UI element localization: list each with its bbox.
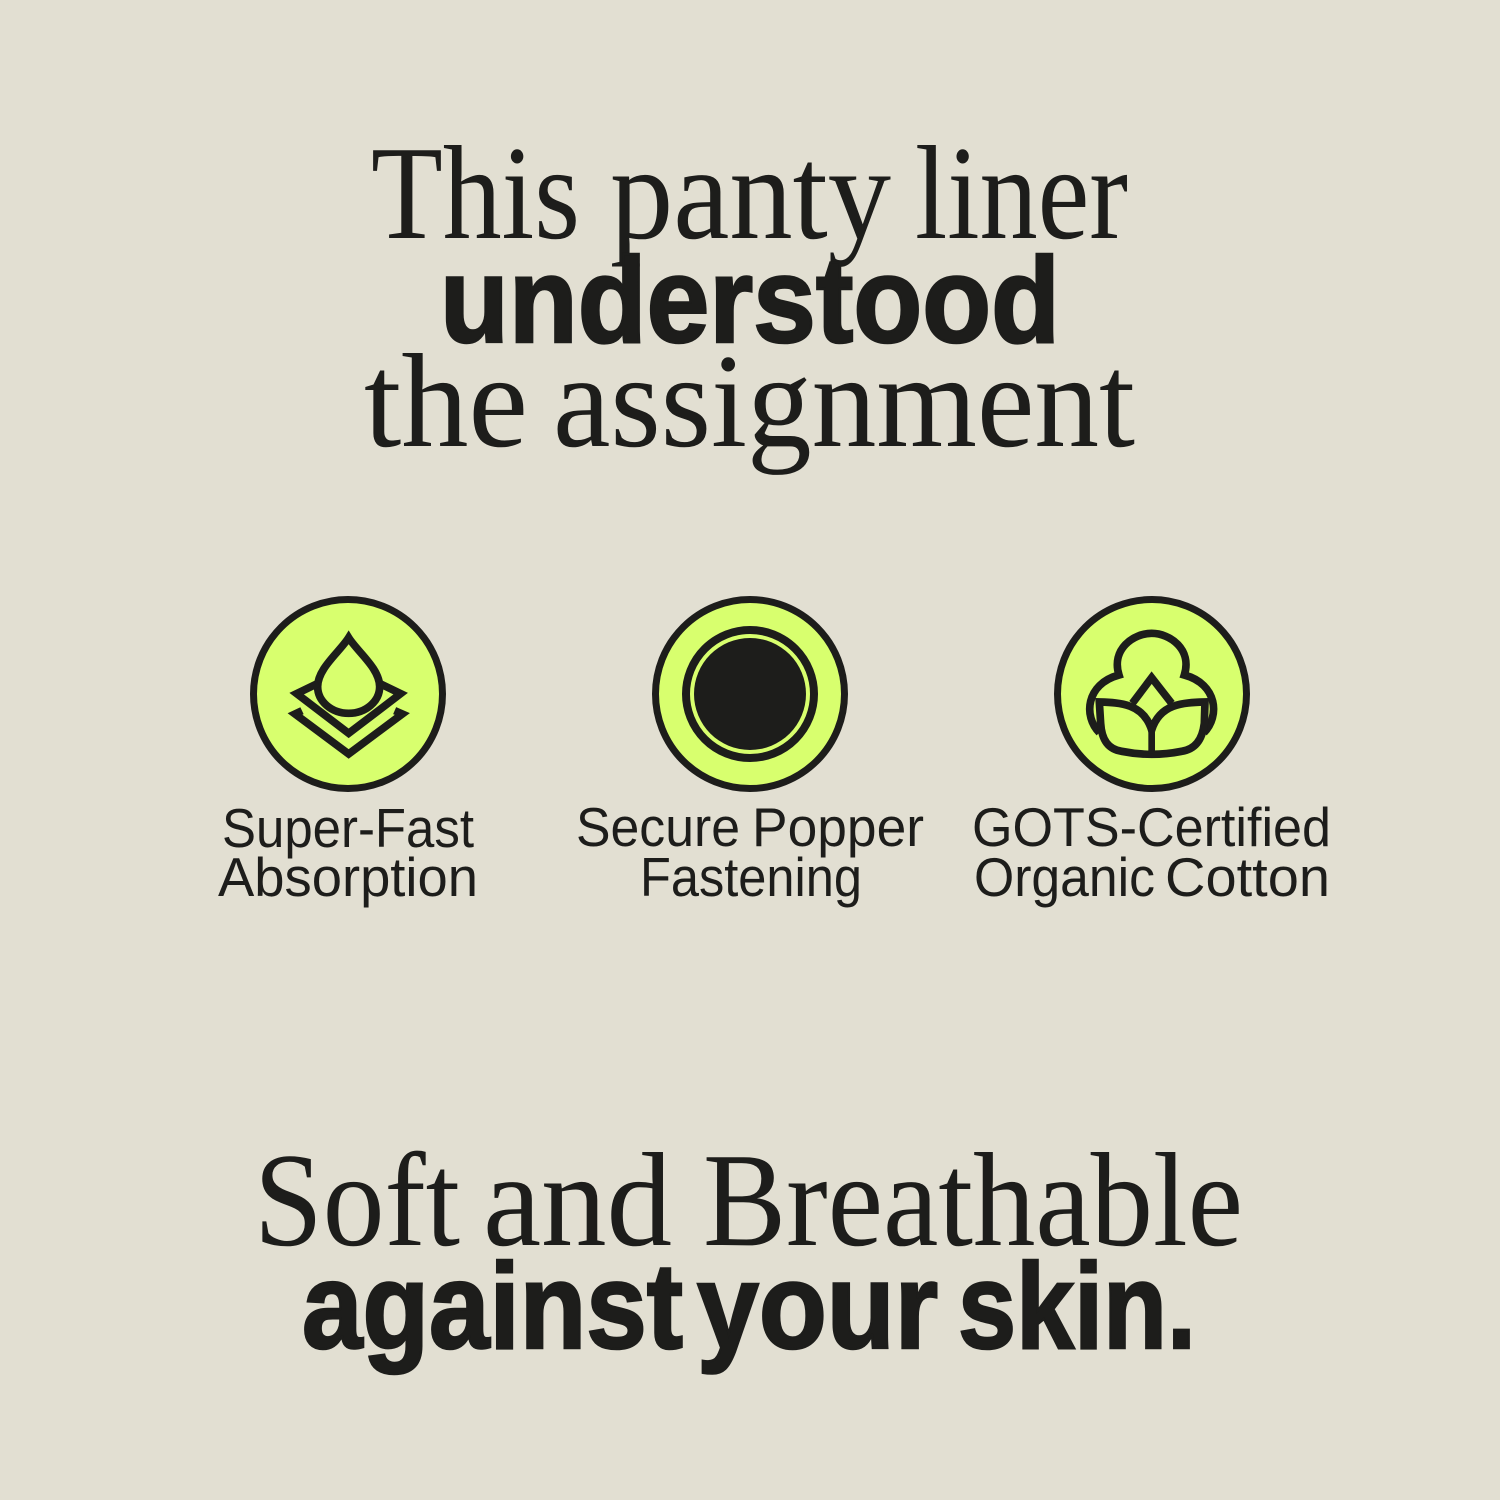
label: cotton: Cotton <box>1165 846 1330 908</box>
label: cotton <box>972 796 1331 908</box>
label: popper: Secure <box>576 796 740 858</box>
label: absorption <box>218 797 478 908</box>
title: understood <box>440 232 1060 368</box>
icon: popper <box>656 600 844 788</box>
title <box>364 119 1135 475</box>
closing statement: skin. <box>958 1238 1196 1374</box>
title: liner <box>915 119 1128 267</box>
closing statement: and <box>483 1126 672 1274</box>
label: absorption: Absorption <box>218 846 478 908</box>
label: absorption: Super-Fast <box>222 797 474 859</box>
title: This <box>371 119 580 267</box>
closing statement <box>254 1126 1243 1374</box>
label: popper: Fastening <box>640 846 862 908</box>
label: cotton: Organic <box>974 846 1155 908</box>
closing statement: Breathable <box>703 1126 1243 1274</box>
closing statement: against <box>302 1238 683 1374</box>
label: cotton: GOTS-Certified <box>972 796 1331 858</box>
label: popper <box>576 796 924 908</box>
title: the <box>364 327 528 475</box>
title: assignment <box>553 327 1135 475</box>
closing statement: Soft <box>254 1126 460 1274</box>
closing statement: your <box>697 1238 938 1374</box>
title: panty <box>610 119 891 267</box>
icon: droplet on layers <box>254 600 442 788</box>
icon: cotton <box>1058 600 1246 788</box>
label: popper: Popper <box>752 796 924 858</box>
